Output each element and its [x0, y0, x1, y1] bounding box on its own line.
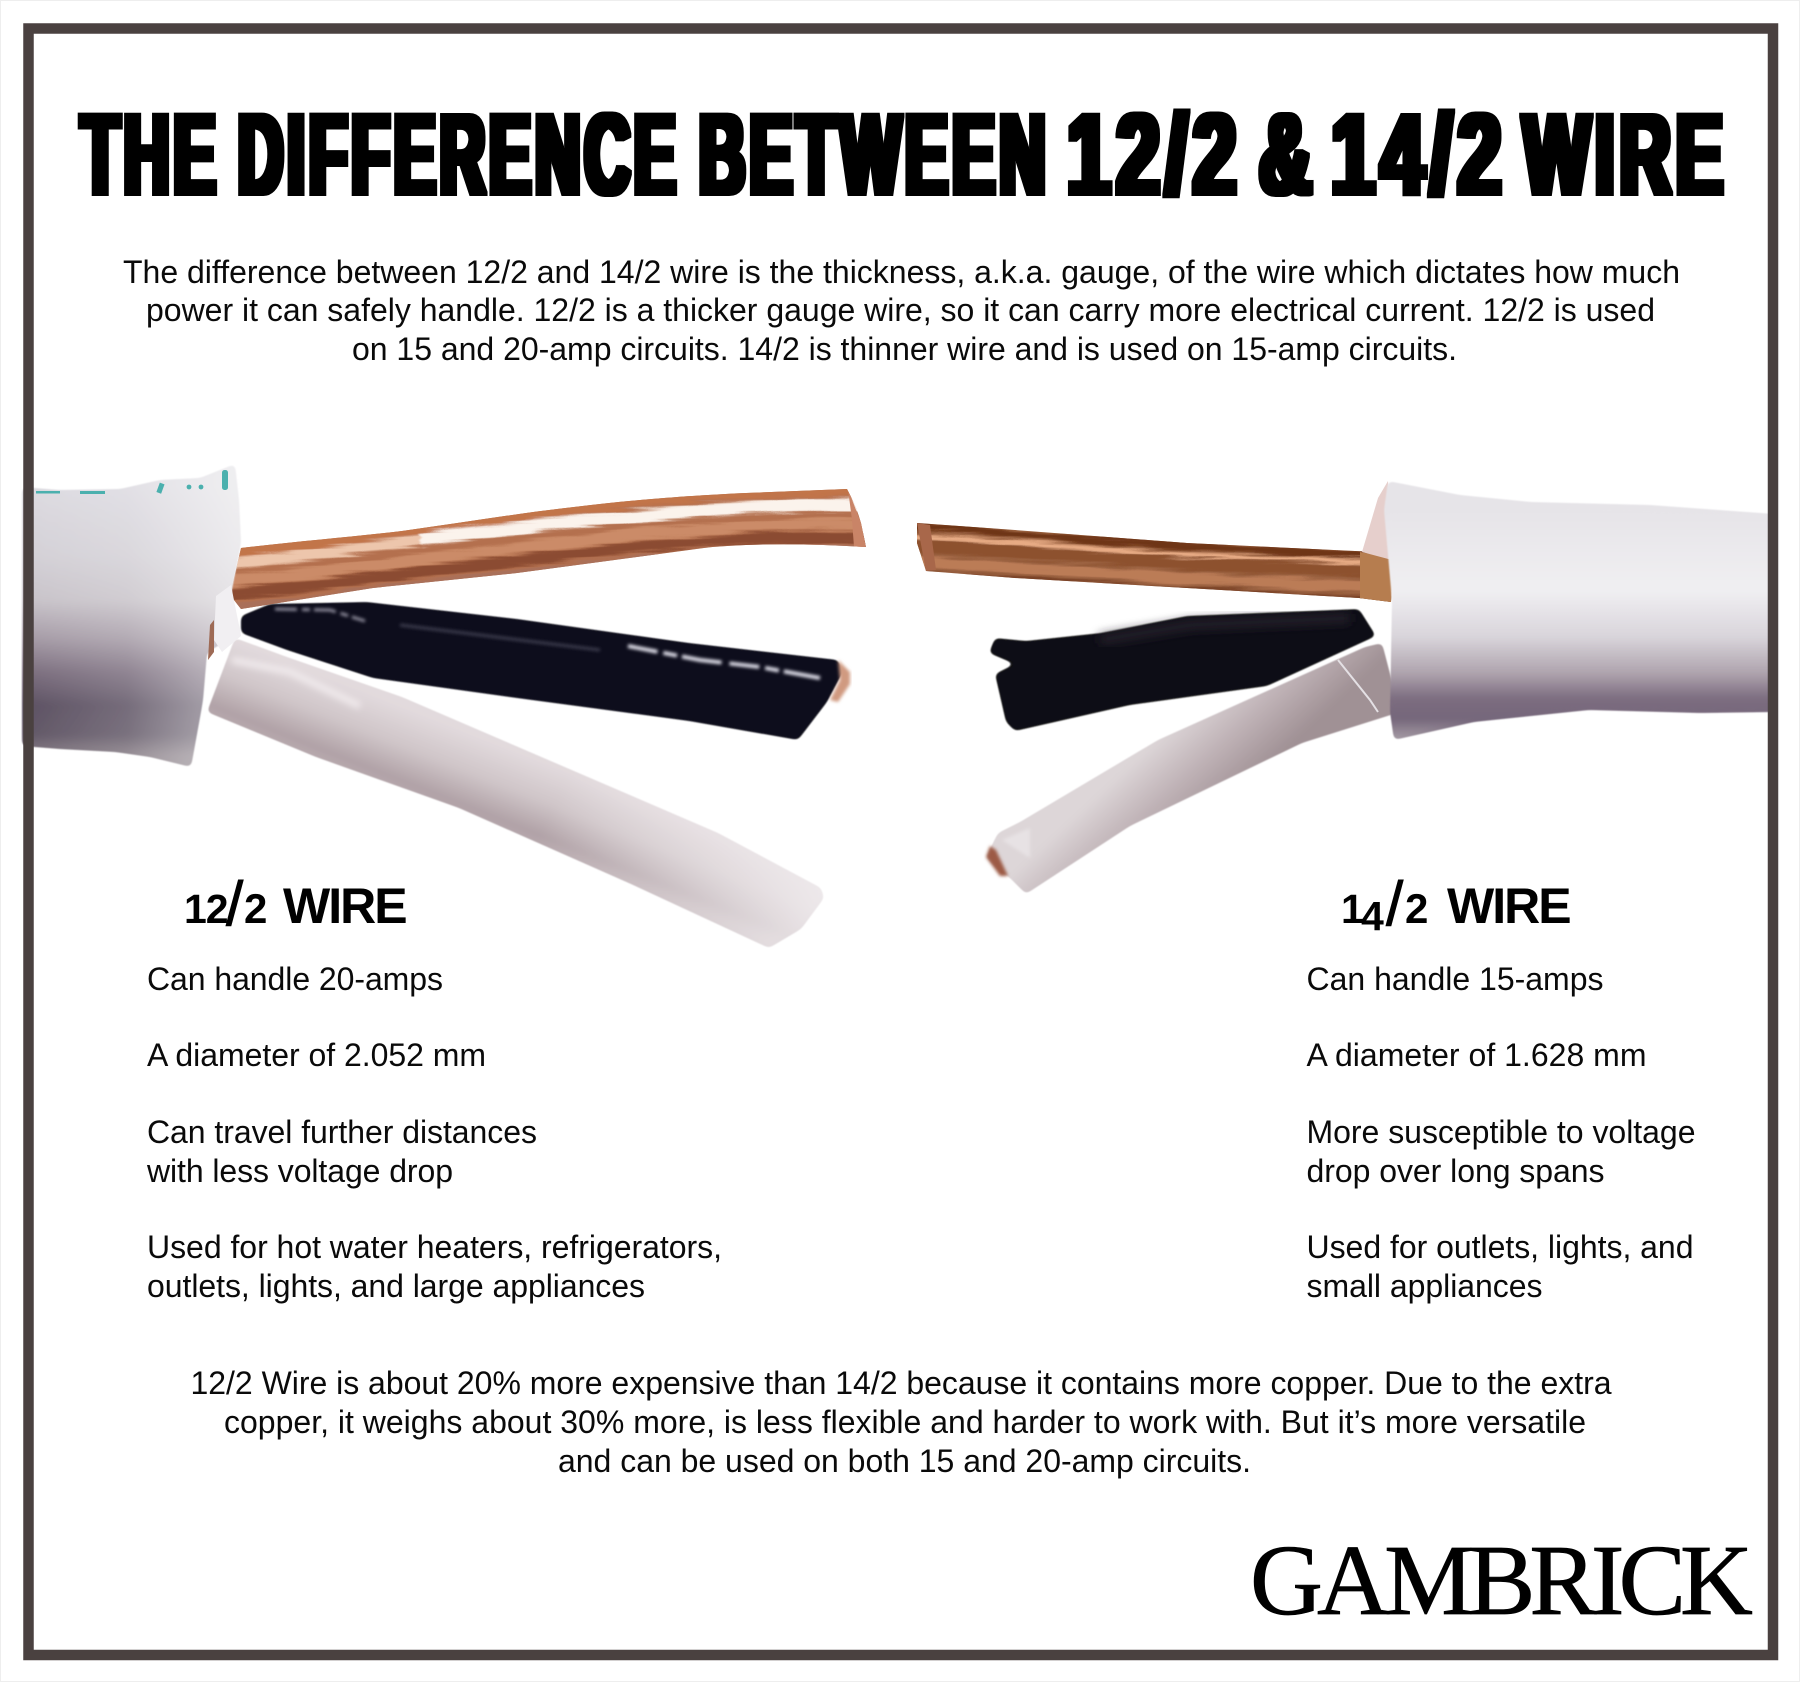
cable jacket 14/2: [1384, 481, 1774, 740]
list: 14/2 wire facts: A diameter of 1.628 mm: [1306, 1037, 1646, 1073]
title: DIFFERENCE: [238, 91, 680, 219]
closing paragraph: [190, 1365, 1612, 1479]
list: 14/2 wire facts: Can handle 15-amps: [1306, 961, 1604, 997]
intro paragraph: on 15 and 20-amp circuits. 14/2 is thinner wire and is used on 15-amp circuits.: [352, 331, 1457, 367]
title: THE: [81, 91, 220, 219]
white neutral wire 14/2: [986, 643, 1400, 894]
brand logo: GAMBRICK: [1250, 1524, 1753, 1636]
list: 12/2 wire facts: Can handle 20-amps: [147, 961, 443, 997]
heading: 14/2 wire: 1: [1341, 886, 1364, 932]
intro paragraph: The difference between 12/2 and 14/2 wire is the thickness, a.k.a. gauge, of the wire which dictates how much: [123, 254, 1680, 290]
list: 14/2 wire facts: drop over long spans: [1306, 1153, 1604, 1189]
torn jacket flap: [214, 585, 241, 652]
heading: 12/2 wire: WIRE: [283, 878, 406, 934]
title: BETWEEN: [699, 91, 1050, 219]
heading: 12/2 wire: /: [226, 870, 244, 939]
list: 12/2 wire facts: with less voltage drop: [146, 1153, 453, 1189]
title: 14/2: [1331, 91, 1507, 219]
white neutral wire 12/2: [207, 638, 824, 948]
list: 12/2 wire facts: A diameter of 2.052 mm: [147, 1037, 486, 1073]
intro paragraph: [123, 254, 1680, 367]
heading: 14/2 wire: 2: [1405, 885, 1428, 932]
list: 12/2 wire facts: Can travel further distances: [147, 1114, 537, 1150]
heading: 14/2 wire: /: [1386, 870, 1404, 939]
closing paragraph: 12/2 Wire is about 20% more expensive than 14/2 because it contains more copper. Due to the extra: [190, 1365, 1612, 1401]
heading: 12/2 wire: 12: [184, 886, 228, 932]
closing paragraph: copper, it weighs about 30% more, is less flexible and harder to work with. But it’s more versatile: [224, 1404, 1586, 1440]
teal print marks on jacket: [36, 470, 228, 494]
list: 14/2 wire facts: small appliances: [1306, 1268, 1542, 1304]
list: 14/2 wire facts: Used for outlets, lights, and: [1306, 1229, 1694, 1265]
heading: 14/2 wire: WIRE: [1447, 878, 1570, 934]
heading: 12/2 wire: 2: [244, 885, 267, 932]
closing paragraph: and can be used on both 15 and 20-amp circuits.: [558, 1443, 1251, 1479]
black hot wire 12/2: [241, 602, 850, 740]
bare copper ground wire 14/2: [917, 523, 1392, 602]
title: [81, 91, 1728, 219]
list: 14/2 wire facts: [1306, 961, 1696, 1304]
black hot wire 14/2: [989, 609, 1376, 731]
list: 14/2 wire facts: More susceptible to voltage: [1306, 1114, 1696, 1150]
list: 12/2 wire facts: Used for hot water heaters, refrigerators,: [147, 1229, 722, 1265]
photo: 12/2 stripped cable: [22, 464, 870, 948]
heading: 14/2 wire: 4: [1361, 893, 1384, 939]
list: 12/2 wire facts: outlets, lights, and large appliances: [147, 1268, 645, 1304]
photo: 14/2 stripped cable: [910, 481, 1774, 894]
cable jacket 12/2: [22, 464, 241, 767]
inner pink jacket edge: [1362, 481, 1392, 560]
intro paragraph: power it can safely handle. 12/2 is a thicker gauge wire, so it can carry more electrical current. 12/2 is used: [146, 292, 1655, 328]
title: &: [1259, 91, 1317, 219]
title: 12/2: [1067, 91, 1242, 219]
list: 12/2 wire facts: [146, 961, 722, 1304]
bare copper ground wire 12/2: [232, 489, 866, 609]
